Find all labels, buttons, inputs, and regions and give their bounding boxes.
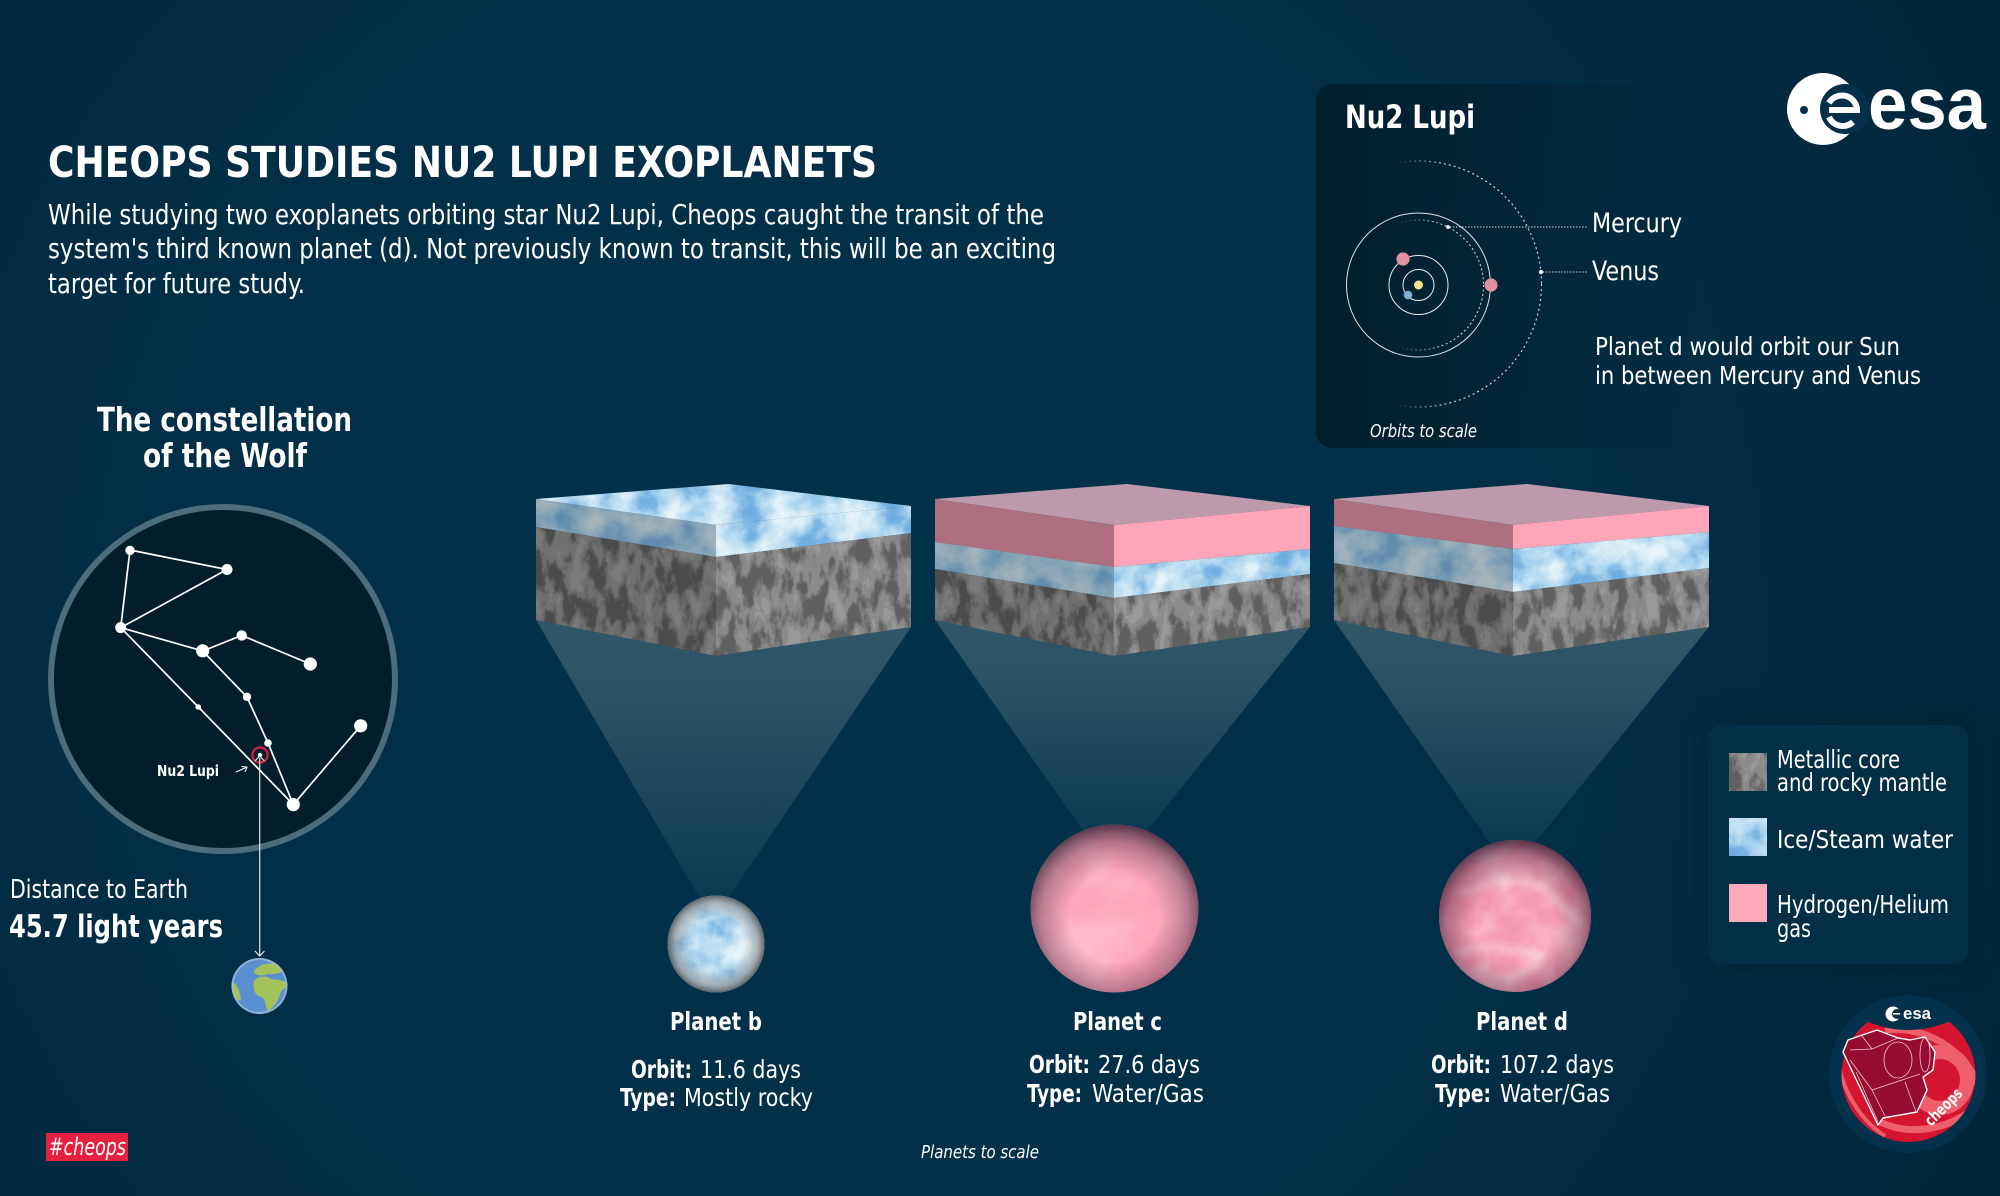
caption: orbits to scale: Orbits to scale (1370, 421, 1477, 442)
text: planet b: Orbit: (631, 1055, 692, 1084)
legend (1700, 717, 1976, 972)
intro text: system's third known planet (d). Not previously known to transit, this will be an exciting (48, 232, 1056, 265)
badge: red disc (1842, 1008, 1976, 1142)
constellation stars (115, 546, 367, 811)
heading: constellation: of the Wolf (143, 436, 308, 475)
arrow: distance to earth (255, 756, 264, 956)
layer: gas (1334, 484, 1709, 549)
planet b (665, 893, 767, 995)
layer: ice sides (536, 499, 911, 557)
distance text: Distance to Earth (10, 875, 188, 905)
badge: cheops label: cheops (1920, 1084, 1966, 1130)
panel heading: Nu2 Lupi (1345, 98, 1475, 136)
text: planet d: Planet d (1476, 1007, 1568, 1036)
caption: planets to scale: Planets to scale (921, 1142, 1039, 1163)
logo: esa: esa (1868, 64, 1987, 145)
text: planet c: Planet c (1073, 1007, 1162, 1036)
beam (935, 620, 1310, 832)
layer: ice sides (1334, 526, 1709, 592)
legend: gas: gas (1777, 914, 1811, 943)
marker: Nu2 Lupi star (252, 747, 268, 763)
panel: Nu2 Lupi orbits (1296, 84, 1921, 448)
text: planet d: Type: (1435, 1079, 1491, 1108)
arrow: label pointer (236, 766, 247, 772)
text: planet c: Type: (1027, 1079, 1082, 1108)
chart: constellation map (51, 507, 395, 851)
title: CHEOPS STUDIES NU2 LUPI EXOPLANETS (48, 138, 877, 188)
planet d (1437, 838, 1593, 994)
text: planet b: Mostly rocky (684, 1083, 813, 1112)
legend: rock (1729, 745, 1947, 797)
beam (1334, 620, 1709, 843)
panel: planet d cross-section (1330, 484, 1711, 843)
text: planet b: Type: (620, 1083, 676, 1112)
legend: gas (1729, 884, 1949, 943)
layer: rock sides (530, 525, 914, 660)
note: planet d position: Planet d would orbit our Sun (1595, 332, 1900, 361)
text: planet b: Planet b (670, 1007, 762, 1036)
badge: cheops mission (1829, 995, 1990, 1153)
legend: ice (1729, 818, 1954, 856)
logo: esa (1787, 64, 1987, 145)
orbit diagram (1296, 161, 1588, 407)
text: planet d (1431, 1007, 1614, 1108)
distance text: 45.7 light years (9, 909, 223, 945)
panel: planet c cross-section (930, 484, 1312, 832)
badge: esa mark (1886, 1004, 1932, 1023)
planet c (1028, 822, 1202, 996)
distance text (9, 875, 223, 945)
intro text: target for future study. (48, 267, 305, 300)
text: planet b (620, 1007, 813, 1112)
legend: ice: Ice/Steam water (1777, 825, 1954, 854)
layer: ice top (536, 484, 911, 525)
badge: esa mark: esa (1903, 1004, 1932, 1023)
layer: gas (935, 484, 1310, 567)
text: planet c (1027, 1007, 1204, 1108)
beam (536, 620, 911, 900)
heading: constellation: The constellation (97, 400, 352, 439)
note: planet d position (1595, 332, 1921, 390)
legend: rock: Metallic core (1777, 745, 1900, 774)
label: Venus: Venus (1592, 256, 1659, 287)
layer: rock sides (1330, 560, 1711, 660)
intro text (48, 198, 1056, 300)
label: Mercury: Mercury (1592, 208, 1682, 239)
text: planet d: Orbit: (1431, 1050, 1491, 1079)
note: planet d position: in between Mercury and Venus (1595, 361, 1921, 390)
text: planet c: 27.6 days (1098, 1050, 1200, 1079)
text: planet c: Orbit: (1029, 1050, 1090, 1079)
legend: gas: Hydrogen/Helium (1777, 890, 1949, 919)
legend: rock: and rocky mantle (1777, 768, 1947, 797)
panel: planet b cross-section (530, 480, 915, 900)
heading: constellation (97, 400, 352, 475)
intro text: While studying two exoplanets orbiting star Nu2 Lupi, Cheops caught the transit of the (48, 198, 1044, 231)
constellation lines (121, 550, 361, 805)
text: planet c: Water/Gas (1092, 1079, 1204, 1108)
hashtag: cheops: #cheops (49, 1133, 126, 1161)
layer: ice sides (935, 542, 1310, 598)
badge: satellite (1843, 1030, 1935, 1125)
icon: earth (231, 958, 288, 1018)
label: Nu2 Lupi: Nu2 Lupi (157, 762, 219, 780)
text: planet b: 11.6 days (700, 1055, 801, 1084)
layer: rock sides (935, 569, 1310, 656)
text: planet d: Water/Gas (1500, 1079, 1610, 1108)
text: planet d: 107.2 days (1500, 1050, 1614, 1079)
